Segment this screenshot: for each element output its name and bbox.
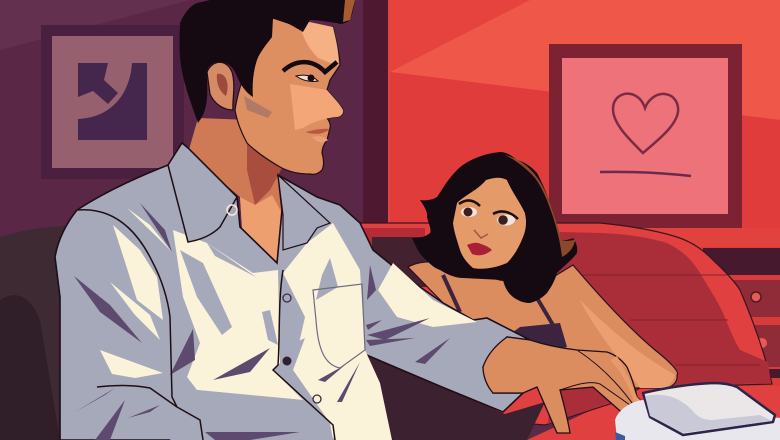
shirt dark streaks [74,203,450,440]
sleeve and placket seams [77,210,335,440]
man's face [235,18,343,174]
man's eyebrow and eye [283,62,337,72]
side cabinet with drawers [590,228,780,392]
shirt cream highlights [100,208,477,440]
white pillow [615,383,780,440]
man [55,0,650,440]
right framed picture [549,44,742,229]
man's neck [188,118,282,265]
woman's hair [412,152,577,303]
pillow base [615,400,780,440]
man's hair [180,0,355,123]
icon: abstract artwork [78,63,147,140]
shirt pocket [313,284,365,368]
woman's dark top [505,323,567,350]
shirt grey folds [170,243,338,440]
red floor [527,386,780,440]
top straps [443,275,553,325]
panel: purple left wall [0,0,388,300]
shirt collar [168,143,237,242]
panel: red right wall [388,0,780,250]
pillow cushion [643,383,775,435]
red sofa [360,223,772,425]
hair highlight [505,155,575,257]
dark sofa [0,226,545,440]
woman's lips [467,243,492,255]
underline stroke [600,172,691,176]
woman [408,152,678,388]
man's mouth [306,129,330,134]
man's ear [207,62,234,110]
shirt buttons [227,205,321,403]
woman's face [453,178,526,269]
icon: heart outline [613,94,678,153]
man's hand and forearm [483,337,650,433]
left framed picture [41,25,184,179]
man's shirt [55,143,530,440]
woman's body and arm [408,262,678,388]
